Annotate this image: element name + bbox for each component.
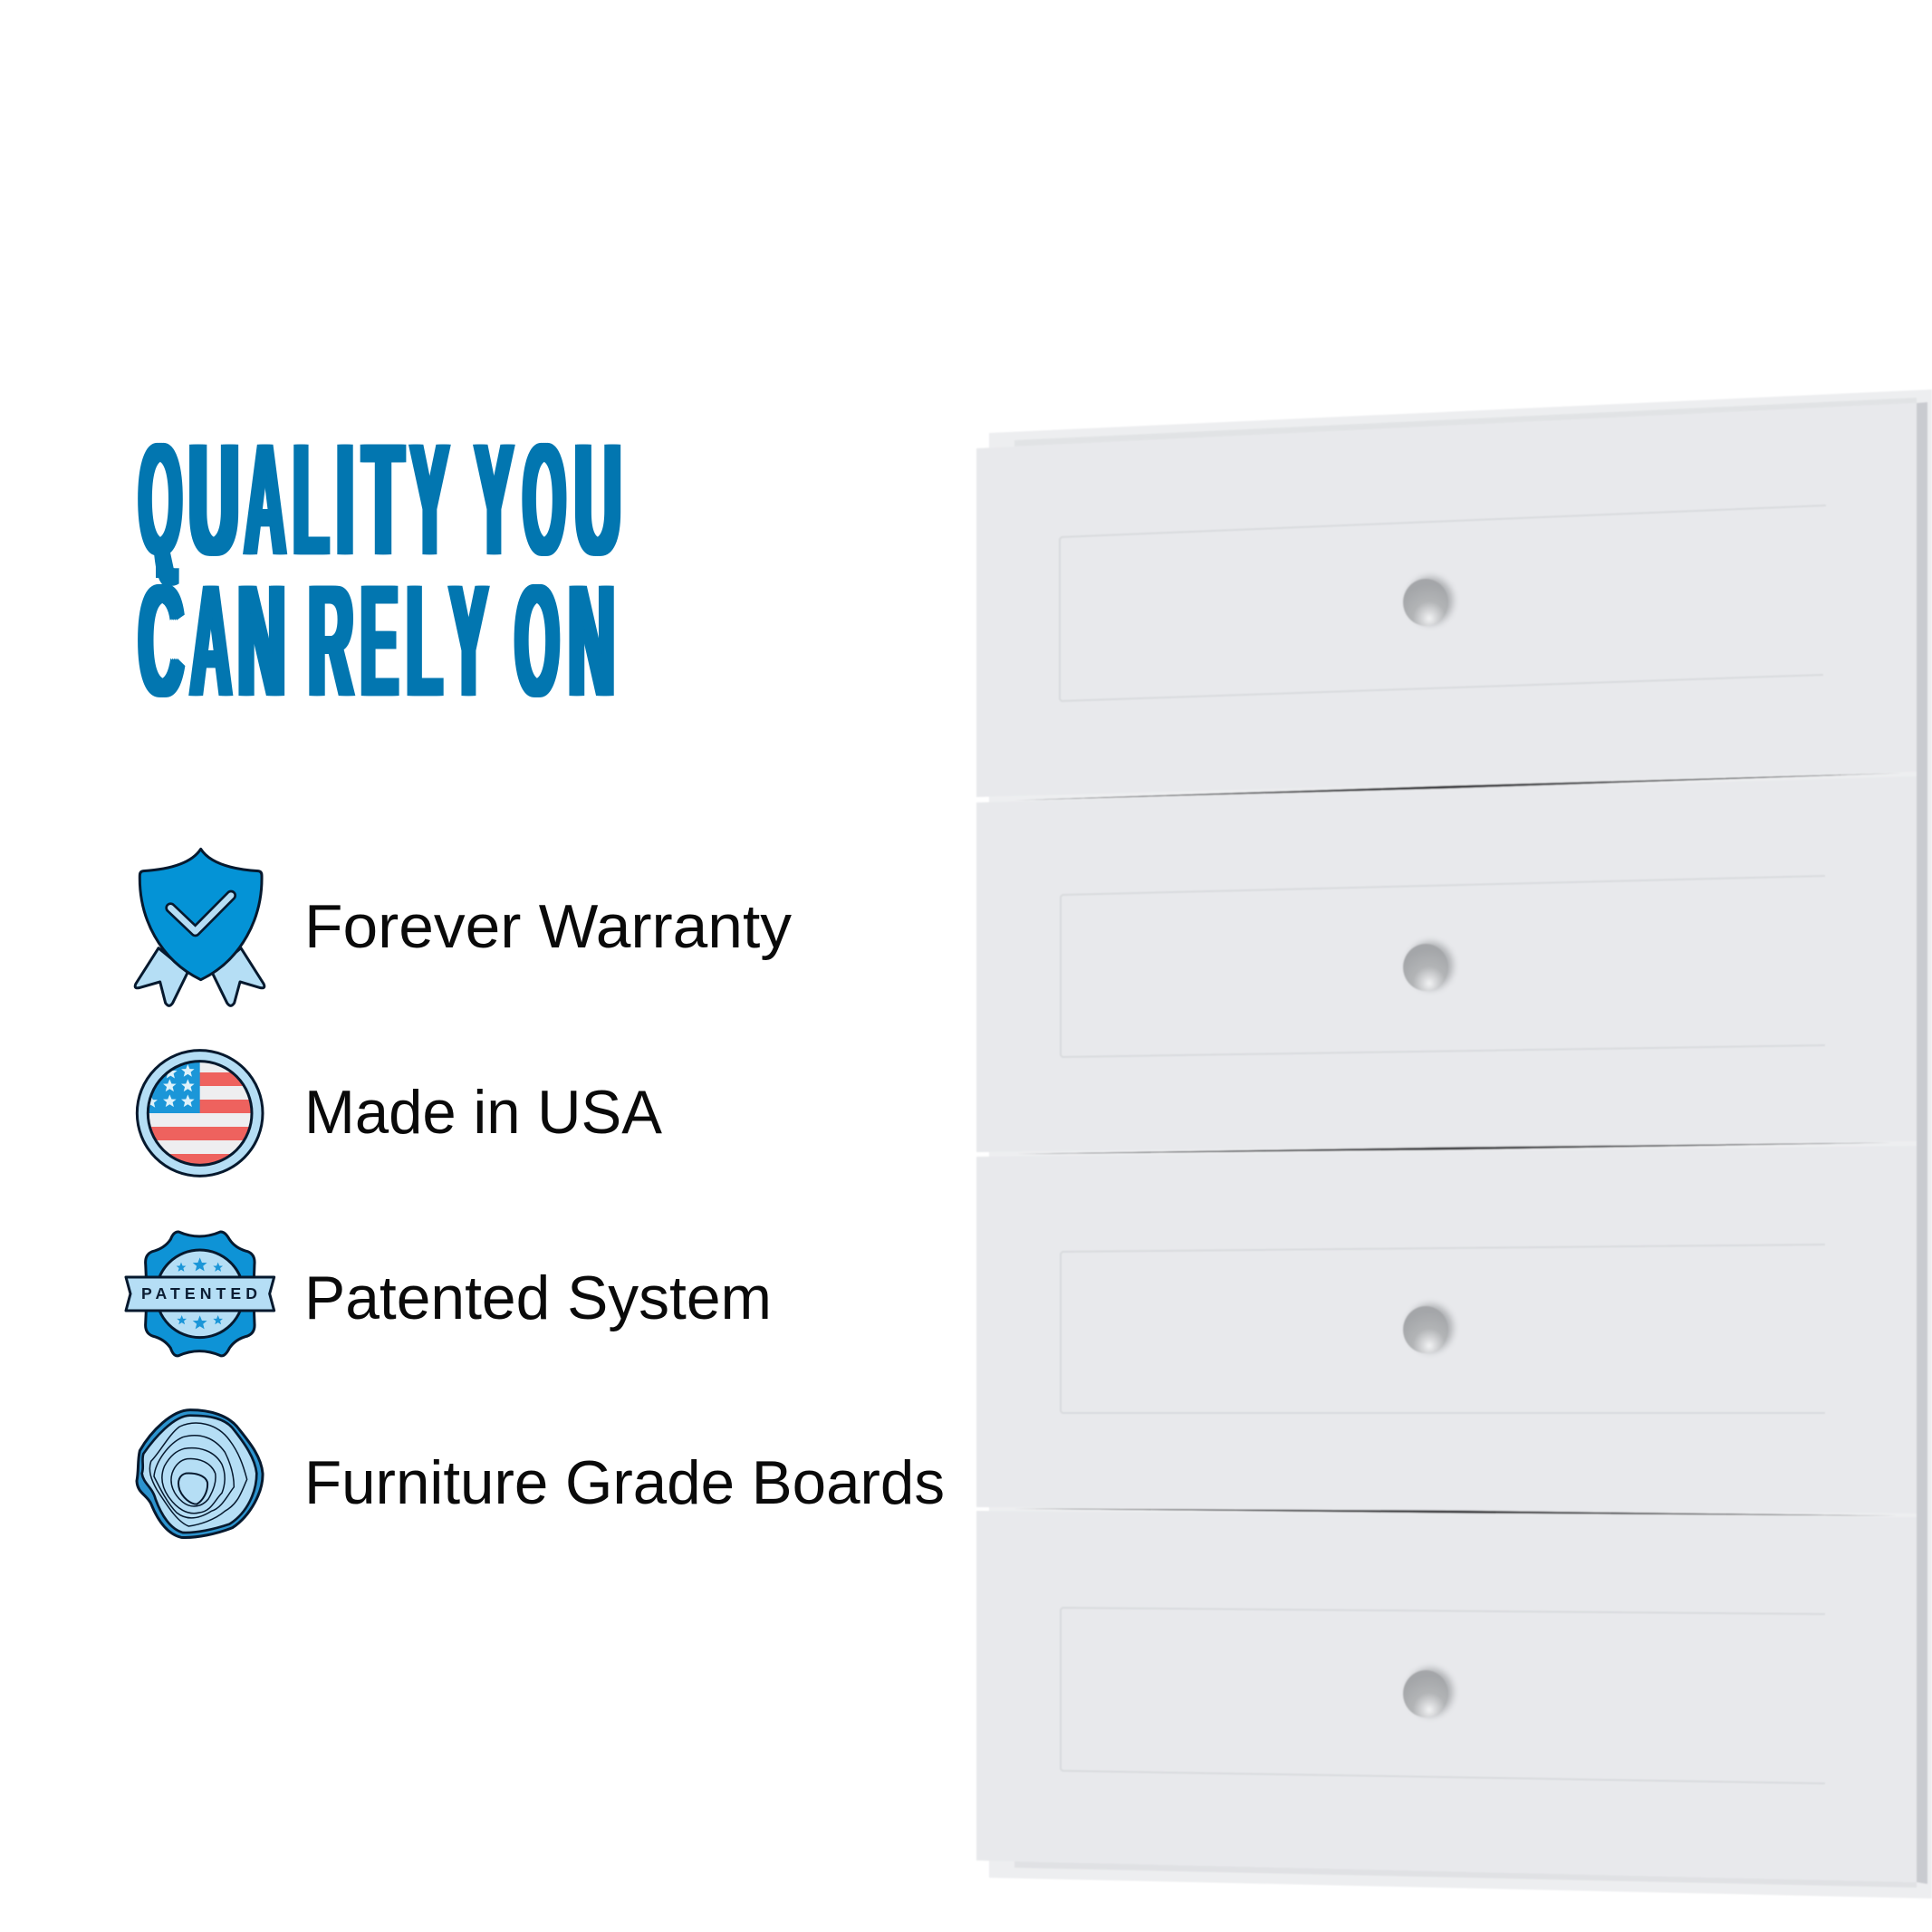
cabinet and icons artwork [125,389,1932,1898]
title line 2: O [514,552,559,730]
icon: patented badge [126,1232,274,1356]
drawer gap line 1 [1014,774,1902,801]
icon: USA flag circle [137,1051,263,1176]
drawer panel 3 [976,1146,1917,1514]
label: Made in USA: Made in USA [304,1078,663,1147]
title line 2 [138,552,614,730]
title line 2: Y [449,552,487,730]
icon: shield with ribbons [135,849,264,1005]
title line 1: U [575,410,621,589]
title line 1: T [363,410,403,589]
title line 2: A [190,552,231,730]
title line 1 [138,410,621,589]
cabinet drawer stack [976,389,1932,1898]
title line 1: L [293,410,329,589]
drawer panel 1 [976,403,1917,797]
badge ribbon [126,1277,274,1311]
top shadow strip [1014,398,1917,447]
title line 1: Y [410,410,448,589]
tree growth rings [149,1423,247,1526]
badge inner circle [156,1250,244,1338]
badge scalloped body [146,1232,255,1356]
title line 2: L [406,552,442,730]
title line 2: R [308,552,353,730]
title line 2: N [568,552,614,730]
title line 1: Q [139,410,182,589]
checkmark [170,896,231,931]
side edge strip [1917,402,1927,1884]
flag outer ring [137,1051,263,1176]
title line 2: N [237,552,285,730]
title line 1: Y [476,410,514,589]
drawer gap line 3 [1013,1509,1898,1516]
title line 2: E [360,552,398,730]
icon: tree rings [137,1410,263,1537]
title line 1: I [336,410,354,589]
title [138,410,621,730]
Q tail [156,553,174,578]
ribbon right [212,948,264,1005]
title line 1: O [523,410,566,589]
drawer panel 4 [976,1511,1917,1882]
tree inner wood [142,1416,256,1533]
label: Patented System: Patented System [304,1264,772,1332]
title line 1: U [189,410,238,589]
label: Furniture Grade Boards: Furniture Grade Boards [304,1448,945,1517]
title line 2: C [138,552,183,730]
badge label: PATENTED [141,1284,257,1302]
drawer gap line 2 [1016,1143,1891,1154]
back board [989,389,1932,1898]
badge stars [177,1257,223,1329]
flag stripes and canton [149,1062,250,1164]
shield body [139,849,262,980]
tree outer bark [137,1410,263,1537]
drawer panel 2 [976,776,1917,1152]
title line 1: A [245,410,286,589]
label: Forever Warranty: Forever Warranty [304,892,792,961]
flag inner ring [148,1062,252,1165]
ribbon left [135,948,187,1005]
bottom shadow strip [1014,1861,1917,1888]
